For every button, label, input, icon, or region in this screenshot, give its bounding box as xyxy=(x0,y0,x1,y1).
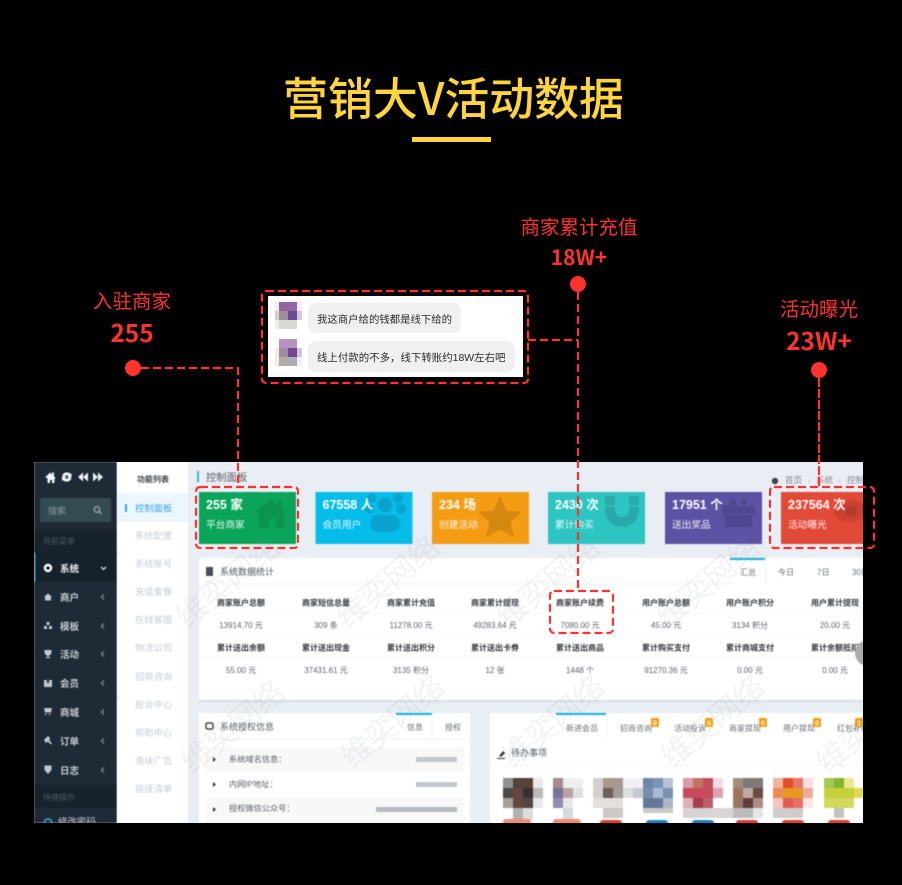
callout: activity exposure xyxy=(770,293,874,548)
statistics table: 0.00 元 xyxy=(737,666,763,675)
stat card: prizes: 17951 个 xyxy=(672,498,723,512)
statistics table: 7080.00 元 xyxy=(560,621,600,630)
stat card: prizes xyxy=(665,492,762,544)
sidebar menu items: 日志 xyxy=(60,765,80,777)
chat bubble two: 线上付款的不多，线下转账约18W左右吧 xyxy=(317,351,506,364)
statistics table: 累计送出积分 xyxy=(387,642,435,652)
pending tabs: 用户提现 xyxy=(783,723,815,733)
callout: merchants joined: 入驻商家 xyxy=(93,285,171,314)
panel: chat evidence xyxy=(262,291,528,383)
statistics table: 37431.61 元 xyxy=(304,666,348,675)
watermarks: 维奕网络 xyxy=(175,674,292,780)
stat card: prizes: 送出奖品 xyxy=(672,518,711,531)
callout: merchant cumulative recharge: 商家累计充值 xyxy=(520,211,638,240)
chat avatar one xyxy=(275,302,302,329)
breadcrumb: 首页 xyxy=(785,475,802,485)
licence rows xyxy=(212,754,458,813)
sidebar section: quick actions: 快捷操作 xyxy=(43,792,75,802)
statistics table: 商家账户总额 xyxy=(217,598,265,608)
sidebar menu: active item: 系统 xyxy=(60,563,80,575)
callout: merchant cumulative recharge xyxy=(520,211,638,633)
watermarks: 维奕网络 xyxy=(655,669,772,775)
statistics table: 49283.64 元 xyxy=(473,621,517,630)
callout: merchants joined: 255 xyxy=(110,315,154,350)
dashboard screenshot xyxy=(10,462,902,828)
statistics table: 3135 积分 xyxy=(393,665,429,675)
watermarks: 维奕网络 xyxy=(10,674,127,780)
statistics table: 累计送出卡券 xyxy=(471,642,519,652)
sidebar section: navigation heading xyxy=(34,530,117,553)
sidebar menu items: 活动 xyxy=(60,649,80,661)
pending tabs: 招商咨询 xyxy=(620,723,652,733)
chat avatar two xyxy=(275,339,302,366)
panel: system licence info xyxy=(199,713,470,823)
sidebar menu items: 商城 xyxy=(60,707,80,719)
list items: 物流公司 xyxy=(135,642,172,653)
statistics table: 商家累计充值 xyxy=(387,598,435,608)
watermarks xyxy=(117,535,863,774)
licence rows: 内网IP地址： xyxy=(229,779,278,789)
callout: activity exposure: 23W+ xyxy=(786,323,852,358)
watermarks: 维奕网络 xyxy=(495,669,612,775)
statistics table: 累计购买支付 xyxy=(642,642,690,652)
statistics table: 20.00 元 xyxy=(820,621,850,630)
chat bubble one xyxy=(308,303,461,333)
sidebar section: navigation heading: 导航菜单 xyxy=(43,536,75,546)
stat card: activities: 创建活动 xyxy=(439,518,478,531)
panel: function list xyxy=(117,462,188,823)
callout: merchant cumulative recharge: 18W+ xyxy=(551,242,607,272)
pending tabs: 商家提现 xyxy=(729,723,761,733)
watermarks: 维奕网络 xyxy=(650,529,767,635)
list items: 链接清单 xyxy=(135,783,172,794)
statistics table: 累计余额抵扣 xyxy=(811,642,859,652)
pending tabs: 0 xyxy=(707,720,711,728)
page header xyxy=(197,471,864,485)
statistics table: 91270.36 元 xyxy=(644,666,688,675)
list items xyxy=(135,530,172,794)
list items: 投诉中心 xyxy=(135,699,172,710)
title: 营销大V活动数据 xyxy=(283,63,624,128)
statistics heading: 系统数据统计 xyxy=(220,566,274,577)
list items: 帮助中心 xyxy=(135,727,172,738)
statistics table: 309 条 xyxy=(314,620,338,630)
statistics table: 用户账户总额 xyxy=(642,598,690,608)
breadcrumb: 控制 xyxy=(847,475,864,485)
page header: 控制面板 xyxy=(206,471,247,484)
watermarks: 维奕网络 xyxy=(10,529,127,635)
pending tabs: 0 xyxy=(761,720,765,728)
stat card: activities xyxy=(432,492,529,544)
licence rows: 授权微信公众号： xyxy=(229,803,295,813)
statistics table: 用户账户积分 xyxy=(726,598,774,608)
pending tabs: 活动投诉 xyxy=(674,723,706,733)
pending heading: 待办事项 xyxy=(511,747,547,758)
sidebar menu items: 商户 xyxy=(60,592,79,604)
stat card: exposure: 活动曝光 xyxy=(788,518,827,531)
statistics tabs: 30日 xyxy=(852,568,869,577)
statistics table: 45.00 元 xyxy=(651,621,681,630)
statistics table: 累计送出余额 xyxy=(217,642,265,652)
statistics table: 11278.00 元 xyxy=(390,621,432,630)
statistics table: 3134 积分 xyxy=(732,620,768,630)
statistics table: 55.00 元 xyxy=(226,666,256,675)
statistics tabs: 汇总 xyxy=(740,567,756,577)
stat card: exposure xyxy=(781,492,871,544)
callout: merchants joined xyxy=(93,285,298,548)
statistics table: 13914.70 元 xyxy=(219,621,263,630)
stat card: merchants xyxy=(199,492,296,544)
statistics table: 用户累计提现 xyxy=(811,598,859,608)
watermarks: 维奕网络 xyxy=(490,529,607,635)
chat bubble one: 我这商户给的钱都是线下给的 xyxy=(317,313,452,326)
list items: 充值套餐 xyxy=(135,586,172,597)
pending tabs: 1 xyxy=(857,720,861,728)
statistics table: 商家累计提现 xyxy=(471,598,519,608)
statistics tabs xyxy=(729,557,863,577)
breadcrumb: 系统 xyxy=(816,475,834,485)
panel: system data statistics xyxy=(199,558,881,702)
pixelated avatars xyxy=(503,778,863,820)
sidebar menu items: 会员 xyxy=(60,678,80,690)
statistics tabs: 7日 xyxy=(817,568,829,577)
breadcrumb: › xyxy=(838,475,841,485)
sidebar section: quick actions xyxy=(34,786,116,823)
watermarks: 维奕网络 xyxy=(335,669,452,775)
list items: 招商咨询 xyxy=(135,671,172,682)
statistics table: 12 张 xyxy=(485,666,505,675)
statistics table xyxy=(199,598,863,675)
stat card: merchants: 255 家 xyxy=(206,497,243,512)
licence tabs: 授权 xyxy=(445,722,461,732)
sidebar menu items: 模板 xyxy=(60,621,80,633)
status pills under avatars xyxy=(502,818,851,823)
statistics table: 累计送出商品 xyxy=(556,642,604,652)
scroll handle xyxy=(854,640,863,666)
statistics table: 累计商城支付 xyxy=(726,642,774,652)
stat card: exposure: 237564 次 xyxy=(788,497,846,512)
pending tabs: 新进会员 xyxy=(566,723,598,733)
pending tabs xyxy=(555,712,863,733)
sidebar menu items: 订单 xyxy=(60,736,80,748)
list items: 在线客服 xyxy=(135,614,172,625)
sidebar menu items xyxy=(44,592,104,777)
sidebar section: quick actions: 修改密码 xyxy=(58,816,96,828)
sidebar search box xyxy=(40,498,111,522)
licence heading: 系统授权信息 xyxy=(220,721,274,732)
statistics table: 1448 个 xyxy=(566,666,594,675)
stat card: activities: 234 场 xyxy=(439,498,476,512)
statistics tabs: 今日 xyxy=(778,567,794,577)
stat card: merchants: 平台商家 xyxy=(206,518,245,531)
statistics table: 0.00 元 xyxy=(822,666,848,675)
active list item xyxy=(117,493,188,522)
title underline xyxy=(412,137,491,142)
stat card: members: 会员用户 xyxy=(322,518,361,531)
active list item: 控制面板 xyxy=(135,502,172,514)
licence tabs: 信息 xyxy=(407,722,423,732)
sidebar search box: 搜索 xyxy=(48,505,66,516)
function list heading: 功能列表 xyxy=(137,474,169,484)
pending heading xyxy=(497,747,547,759)
list items: 系统配置 xyxy=(135,530,172,541)
statistics table: 商家短信总量 xyxy=(302,598,350,608)
callout: activity exposure: 活动曝光 xyxy=(780,293,858,322)
list items: 系统账号 xyxy=(135,558,172,569)
pending tabs: 0 xyxy=(815,720,819,728)
stat card: purchases xyxy=(548,492,645,544)
stat card: members xyxy=(316,492,412,544)
licence rows: 系统域名信息： xyxy=(229,754,286,764)
panel: dark sidebar xyxy=(34,462,117,828)
statistics table: 累计送出现金 xyxy=(302,642,350,652)
breadcrumb xyxy=(772,475,864,485)
chat bubble two xyxy=(308,341,515,372)
sidebar toolbar icons xyxy=(45,472,103,483)
pending tabs: 红包补贴 xyxy=(837,723,869,733)
statistics table: 商家账户续费 xyxy=(556,598,604,608)
panel: pending items xyxy=(490,713,869,826)
pending tabs: 0 xyxy=(653,720,657,728)
list items: 滑块广告 xyxy=(135,755,172,766)
stat card: members: 67558 人 xyxy=(322,498,374,512)
licence tabs xyxy=(395,712,462,732)
watermarks: 维奕网络 xyxy=(170,529,287,635)
stat card: purchases: 累计购买 xyxy=(555,518,594,531)
stat card: purchases: 2430 次 xyxy=(555,497,599,512)
sidebar menu: active item xyxy=(34,553,117,582)
watermarks: 维奕网络 xyxy=(330,529,447,635)
breadcrumb: › xyxy=(808,475,811,485)
